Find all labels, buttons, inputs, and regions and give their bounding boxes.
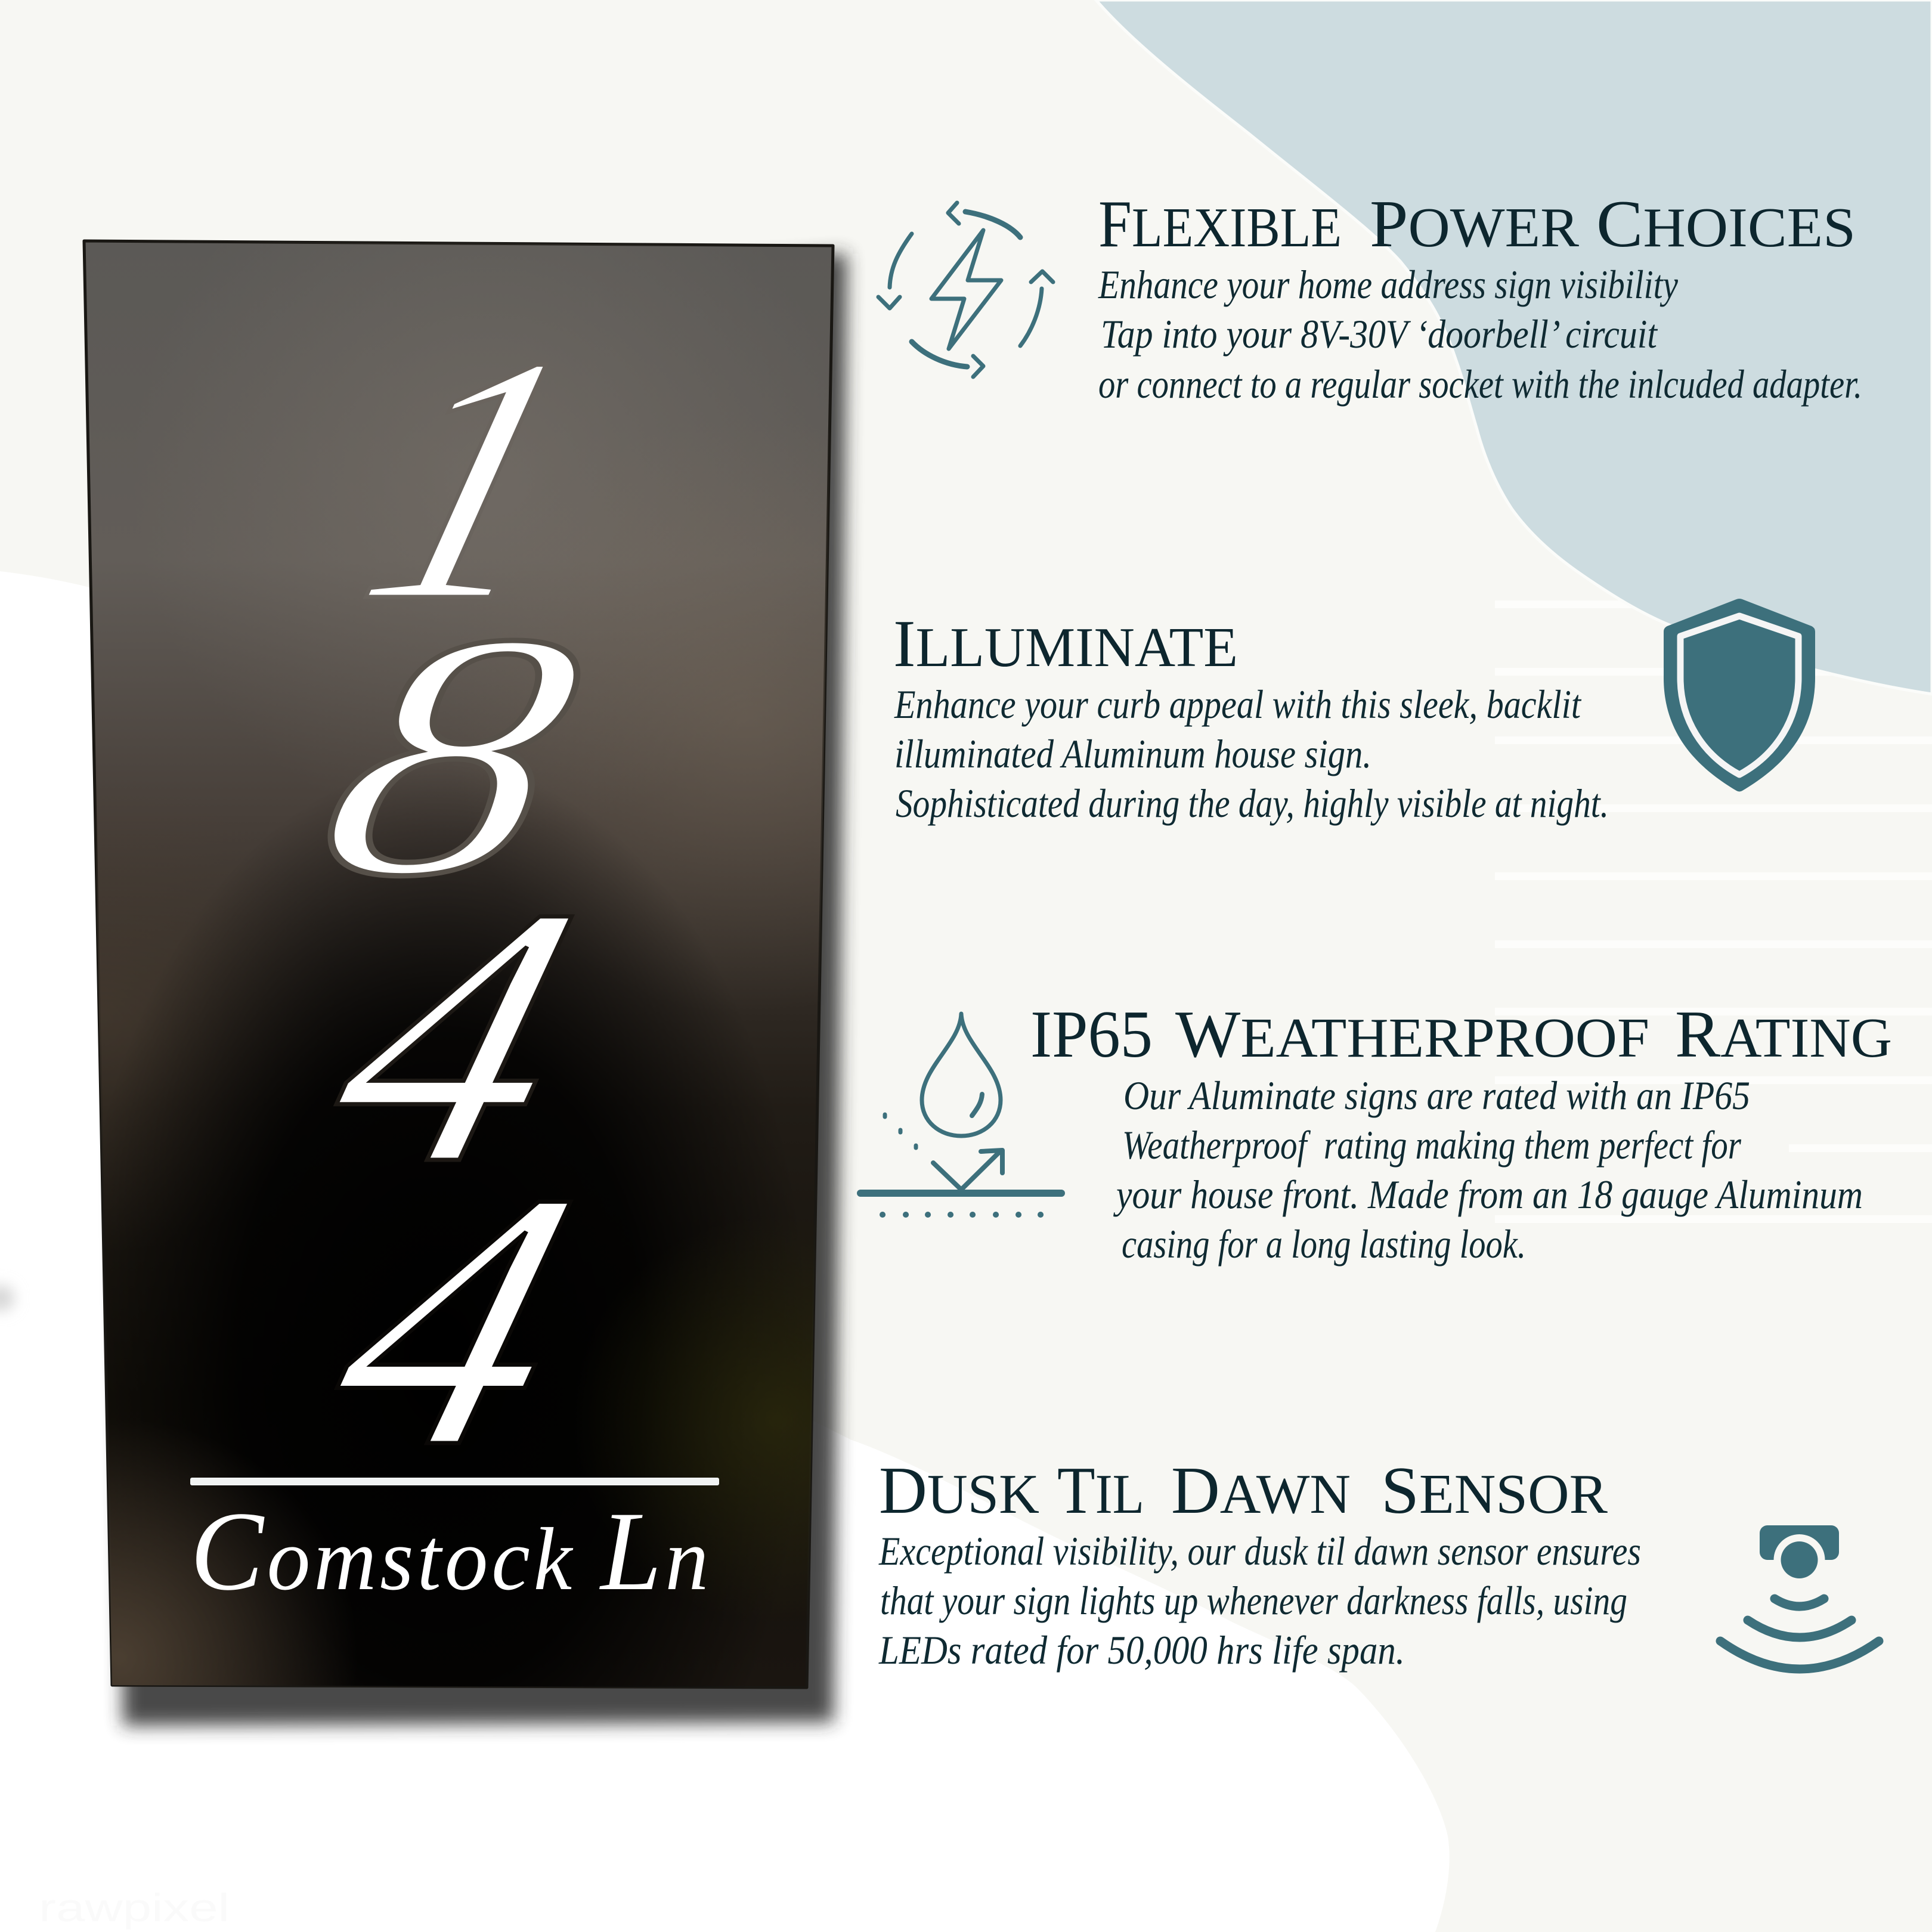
section: weatherproof rating [860, 998, 1892, 1267]
plaque: address sign [84, 241, 833, 1688]
body text: that your sign lights up whenever darkness falls, using [880, 1578, 1627, 1623]
smudge at left edge [0, 1285, 14, 1311]
body text: Sophisticated during the day, highly visible at night. [896, 781, 1609, 826]
background blob: pale blue [1096, 0, 1932, 694]
heading: DAWN [1171, 1454, 1351, 1528]
heading: POWER [1370, 187, 1579, 261]
body text: Exceptional visibility, our dusk til dawn sensor ensures [878, 1528, 1641, 1574]
heading: SENSOR [1381, 1454, 1608, 1528]
icon: lightning bolt with cycle arrows [878, 203, 1053, 377]
heading: CHOICES [1596, 187, 1856, 261]
house number digit 8: 8 [290, 562, 614, 948]
icon: dusk sensor [1720, 1525, 1879, 1669]
heading: ILLUMINATE [893, 607, 1238, 681]
body text [878, 1528, 1641, 1673]
body text: Enhance your home address sign visibility [1098, 262, 1679, 307]
background streaks [1495, 600, 1932, 1223]
body text: illuminated Aluminum house sign. [894, 731, 1371, 776]
heading: RATING [1675, 998, 1892, 1072]
icon: shield [1664, 599, 1815, 792]
section: flexible power choices [878, 187, 1862, 407]
body text: Our Aluminate signs are rated with an IP65 [1123, 1073, 1750, 1118]
body text [1098, 262, 1862, 407]
heading: FLEXIBLE [1098, 187, 1342, 261]
heading [1030, 998, 1892, 1072]
background blob: white [0, 571, 1450, 1932]
body text: LEDs rated for 50,000 hrs life span. [878, 1627, 1405, 1673]
plaque shadow [110, 253, 847, 1726]
section: illuminate [893, 599, 1815, 826]
house number digit 1: 1 [333, 283, 613, 673]
body text: Tap into your 8V-30V ‘doorbell’ circuit [1101, 311, 1658, 357]
icon: water drop on surface [860, 1014, 1061, 1215]
body text: Weatherproof rating making them perfect for [1122, 1122, 1741, 1168]
heading: WEATHERPROOF [1175, 998, 1649, 1072]
heading [879, 1454, 1608, 1528]
street name: Comstock Ln [190, 1489, 712, 1614]
house number digit 4: 4 [299, 831, 612, 1240]
heading: TIL [1057, 1454, 1144, 1528]
body text [894, 682, 1609, 826]
heading: IP65 [1030, 998, 1153, 1072]
section: dusk til dawn sensor [878, 1454, 1879, 1673]
heading: DUSK [879, 1454, 1039, 1528]
body text: Enhance your curb appeal with this sleek, backlit [894, 682, 1582, 727]
body text: casing for a long lasting look. [1122, 1221, 1526, 1267]
body text [1113, 1073, 1863, 1267]
house number digit 4: 4 [300, 1117, 611, 1523]
divider line on plaque [190, 1478, 719, 1485]
watermark: rawpixel [39, 1885, 230, 1930]
heading [1098, 187, 1856, 261]
